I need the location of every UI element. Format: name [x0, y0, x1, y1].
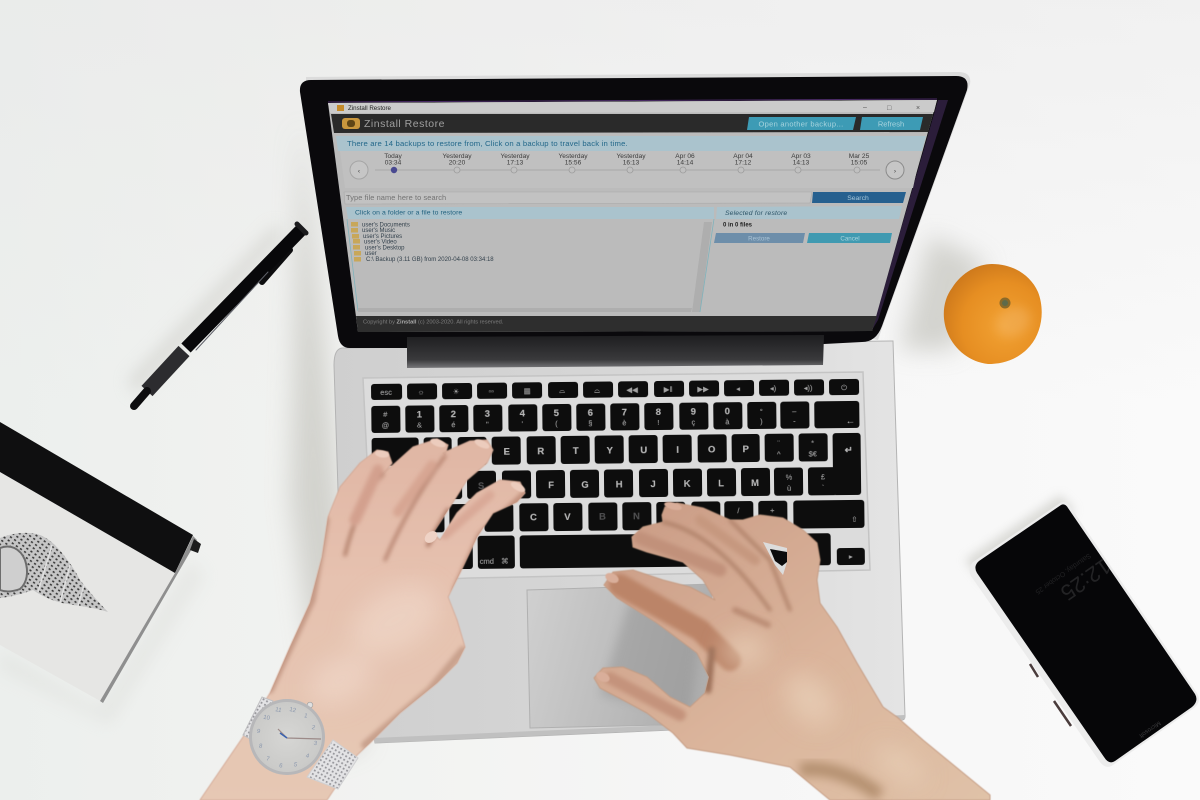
left hand silhouette — [200, 439, 525, 800]
home letter key row: H — [616, 479, 623, 490]
lid rim — [306, 72, 970, 340]
number key row: 0 — [725, 406, 730, 417]
search field — [344, 192, 906, 204]
folder list panel: user's Music — [362, 228, 395, 234]
base front lip — [373, 715, 905, 743]
home letter key row: ` — [822, 483, 824, 492]
number key row: à — [725, 417, 730, 426]
pen body — [186, 230, 301, 348]
watch strap top — [243, 697, 273, 740]
top letter key row: ^ — [777, 450, 781, 459]
home letter key row: J — [650, 479, 656, 490]
watch numerals: 9 — [256, 729, 261, 735]
window background — [328, 100, 937, 332]
number key row: ! — [657, 418, 660, 427]
backup timeline: Yesterday — [442, 153, 472, 160]
number key row — [371, 401, 859, 433]
pen tip — [134, 391, 147, 406]
number key row: ° — [760, 407, 763, 416]
function key row: ☼ — [418, 387, 425, 397]
bottom letter key row: V — [564, 512, 571, 523]
notebook spine edge — [100, 536, 197, 703]
function key row: ◂)) — [804, 383, 813, 392]
top letter key row: R — [537, 446, 544, 457]
backup timeline: › — [894, 168, 896, 175]
right fingernails — [595, 500, 683, 684]
number key row: # — [383, 410, 388, 419]
number key row: ' — [522, 419, 524, 428]
home letter key row: ù — [787, 484, 791, 493]
number key row: - — [793, 417, 796, 426]
top letter key row: Y — [606, 445, 614, 457]
watch numerals: 4 — [305, 753, 310, 760]
folder list panel: user — [365, 251, 377, 257]
phone brand: Microsoft — [1138, 719, 1161, 738]
function key row: esc — [380, 388, 392, 397]
bottom letter key row: B — [599, 512, 606, 523]
pen grip — [147, 351, 184, 391]
backup timeline — [340, 151, 921, 188]
search field: Search — [847, 195, 869, 202]
watch numerals: 3 — [313, 741, 318, 747]
number key row: @ — [382, 421, 389, 430]
orange fruit — [944, 264, 1042, 364]
function key row: ☀ — [453, 387, 460, 396]
laptop — [300, 72, 970, 743]
number key row: 8 — [656, 407, 661, 418]
number key row: 9 — [691, 407, 696, 418]
bottom letter key row: N — [633, 511, 640, 522]
title bar — [328, 100, 937, 113]
folder list panel: user's Video — [364, 240, 397, 246]
app header bar: Zinstall Restore — [364, 118, 445, 130]
backup timeline: 16:13 — [623, 160, 640, 166]
watch numerals: 10 — [263, 715, 271, 722]
title bar: □ — [887, 105, 892, 112]
number key row: § — [588, 419, 593, 428]
watch numerals: 1 — [303, 713, 309, 720]
function key row: ◂) — [770, 384, 777, 393]
selected for restore panel — [714, 206, 902, 243]
top letter key row: P — [742, 444, 750, 455]
title bar: – — [863, 104, 867, 111]
bottom letter key row: / — [737, 506, 740, 515]
right hand silhouette — [594, 503, 990, 800]
watch numerals: 2 — [311, 725, 316, 732]
bottom letter key row — [372, 500, 865, 533]
left hand shading — [270, 456, 525, 745]
desk shadows — [0, 120, 1075, 760]
function key row: ◀◀ — [626, 385, 639, 394]
trackpad — [527, 584, 712, 728]
number key row: & — [417, 420, 422, 430]
shell illustration — [0, 533, 108, 612]
watch hands — [278, 729, 321, 739]
watch numerals: 7 — [266, 756, 271, 763]
backup timeline: Apr 06 — [675, 153, 695, 160]
home letter key row: G — [581, 480, 589, 491]
backup timeline: Mar 25 — [849, 153, 870, 160]
orange stem — [1000, 298, 1010, 308]
lock screen date: Saturday, October 25 — [1034, 551, 1092, 595]
watch numerals: 12 — [289, 707, 297, 714]
space key row — [443, 532, 865, 569]
number key row: 5 — [554, 408, 560, 419]
number key row: 4 — [520, 408, 526, 419]
top letter key row: U — [640, 445, 647, 456]
app header bar — [331, 114, 933, 133]
title bar: Zinstall Restore — [348, 105, 392, 112]
top letter key row: O — [708, 444, 715, 455]
phone — [969, 502, 1199, 767]
bottom letter key row: + — [770, 506, 775, 515]
screen — [328, 99, 937, 332]
function key row: ▶‖ — [664, 385, 673, 394]
number key row: " — [486, 420, 489, 429]
home letter key row: % — [786, 473, 793, 482]
selected for restore panel: Cancel — [840, 236, 860, 242]
space key row: cmd — [480, 557, 494, 566]
folder list panel: C:\ Backup (3.11 GB) from 2020-04-08 03:34:18 — [366, 257, 494, 263]
function key row: ⌓ — [559, 386, 566, 395]
orange — [944, 264, 1042, 364]
laptop base — [334, 341, 905, 743]
top letter key row: * — [811, 438, 814, 447]
number key row: 1 — [417, 409, 423, 421]
pen highlight — [196, 272, 268, 350]
pen — [134, 224, 306, 406]
space key row: ◂ — [782, 553, 786, 562]
top letter key row: T — [573, 446, 579, 457]
watch strap bottom — [307, 740, 358, 789]
watch crown — [307, 702, 313, 708]
phone side buttons — [1030, 664, 1071, 726]
keyboard — [371, 379, 865, 570]
number key row: é — [451, 420, 456, 429]
backup timeline: 17:12 — [735, 160, 752, 166]
function key row: ⏻ — [841, 383, 848, 392]
backup timeline: 15:05 — [851, 160, 868, 166]
info banner — [336, 136, 926, 151]
backup timeline: Today — [384, 153, 402, 160]
space key row: ▸ — [849, 552, 853, 561]
info banner: There are 14 backups to restore from, Click on a backup to travel back in time. — [347, 139, 628, 148]
notebook clip — [190, 539, 201, 553]
finger gap showing keyboard — [763, 542, 787, 575]
home letter key row: £ — [821, 472, 826, 481]
backup timeline: Apr 04 — [733, 153, 753, 160]
right hand shading — [610, 520, 931, 795]
hand shadow on trackpad — [600, 600, 705, 715]
home letter key row — [372, 467, 837, 500]
watch numerals: 5 — [293, 762, 298, 769]
phone body — [969, 502, 1199, 767]
orange peel highlight — [990, 301, 1036, 343]
selected for restore panel: Selected for restore — [725, 210, 787, 217]
backup timeline: Apr 03 — [791, 153, 811, 160]
right hand — [594, 500, 990, 800]
laptop lid — [300, 76, 968, 348]
search field: Type file name here to search — [346, 193, 446, 202]
top letter key row: E — [503, 447, 510, 458]
backup timeline: Yesterday — [500, 153, 530, 160]
selected for restore panel: Restore — [748, 236, 770, 242]
hinge — [407, 335, 824, 368]
function key row — [371, 379, 859, 400]
backup timeline: 17:13 — [507, 160, 524, 166]
footer bar: Copyright by Zinstall (c) 2003-2020. All rights reserved. — [363, 320, 504, 326]
number key row: ) — [760, 417, 763, 426]
pen cap — [297, 224, 306, 233]
top letter key row: $€ — [809, 449, 818, 458]
phone screen — [975, 504, 1196, 762]
app header bar: Refresh — [878, 120, 904, 128]
footer bar — [356, 316, 877, 332]
forearm tan patch — [800, 769, 880, 795]
app header bar: Open another backup... — [758, 120, 844, 128]
left thumb tip — [422, 529, 440, 545]
left fingernails — [374, 437, 527, 494]
folder list panel: user's Pictures — [363, 234, 402, 240]
purple top line — [328, 99, 937, 102]
lock screen clock: 12:25 — [1056, 554, 1115, 606]
top letter key row: I — [676, 445, 679, 456]
number key row: 6 — [588, 408, 593, 419]
watch case and dial — [249, 699, 325, 775]
number key row: – — [792, 407, 797, 416]
function key row: ▫▫ — [488, 387, 494, 396]
number key row: 3 — [485, 409, 490, 420]
backup timeline: 03:34 — [385, 160, 402, 166]
bottom letter key row: ⇧ — [851, 515, 858, 524]
folder list panel: Click on a folder or a file to restore — [355, 210, 462, 216]
home letter key row: S — [478, 481, 484, 492]
number key row: 2 — [451, 409, 456, 420]
watch numerals: 6 — [279, 763, 284, 770]
number key row: 7 — [622, 407, 627, 418]
notebook — [0, 422, 201, 703]
number key row: ← — [846, 416, 855, 427]
top letter key row: ¨ — [777, 439, 780, 448]
number key row: ( — [555, 419, 558, 428]
function key row: ◂ — [736, 384, 740, 393]
home letter key row: M — [751, 478, 759, 489]
folder list panel: user's Documents — [362, 222, 410, 228]
bottom letter key row: C — [530, 512, 537, 523]
number key row: ç — [691, 418, 696, 427]
top letter key row — [372, 433, 861, 500]
number key row: è — [622, 418, 627, 427]
watch numerals — [250, 701, 324, 776]
notebook cover page — [0, 472, 175, 702]
function key row: ▶▶ — [697, 384, 710, 394]
function key row: ▦ — [523, 386, 531, 395]
home letter key row: L — [718, 478, 724, 489]
top letter key row: ↵ — [845, 445, 853, 456]
home letter key row: F — [548, 480, 554, 491]
folder list panel — [346, 207, 714, 312]
watch numerals: 8 — [258, 743, 263, 750]
backup timeline: 14:14 — [677, 160, 694, 166]
backup timeline: 14:13 — [793, 160, 810, 166]
title bar: × — [916, 105, 920, 112]
keyboard well — [363, 372, 870, 582]
backup timeline: 15:56 — [565, 160, 582, 166]
backup timeline: Yesterday — [616, 153, 646, 160]
watch numerals: 11 — [275, 707, 283, 714]
space key row: ⌘ — [501, 557, 509, 566]
notebook black band — [0, 422, 193, 573]
function key row: ⌓ — [594, 386, 601, 395]
selected for restore panel: 0 in 0 files — [723, 222, 753, 228]
pen clip — [262, 250, 290, 282]
backup timeline: Yesterday — [558, 153, 588, 160]
backup timeline: 20:20 — [449, 160, 466, 166]
backup timeline: ‹ — [358, 168, 360, 175]
home letter key row: K — [684, 479, 691, 490]
left hand and watch — [200, 437, 527, 800]
lid right reflection — [872, 100, 948, 330]
folder list panel: user's Desktop — [365, 246, 405, 252]
